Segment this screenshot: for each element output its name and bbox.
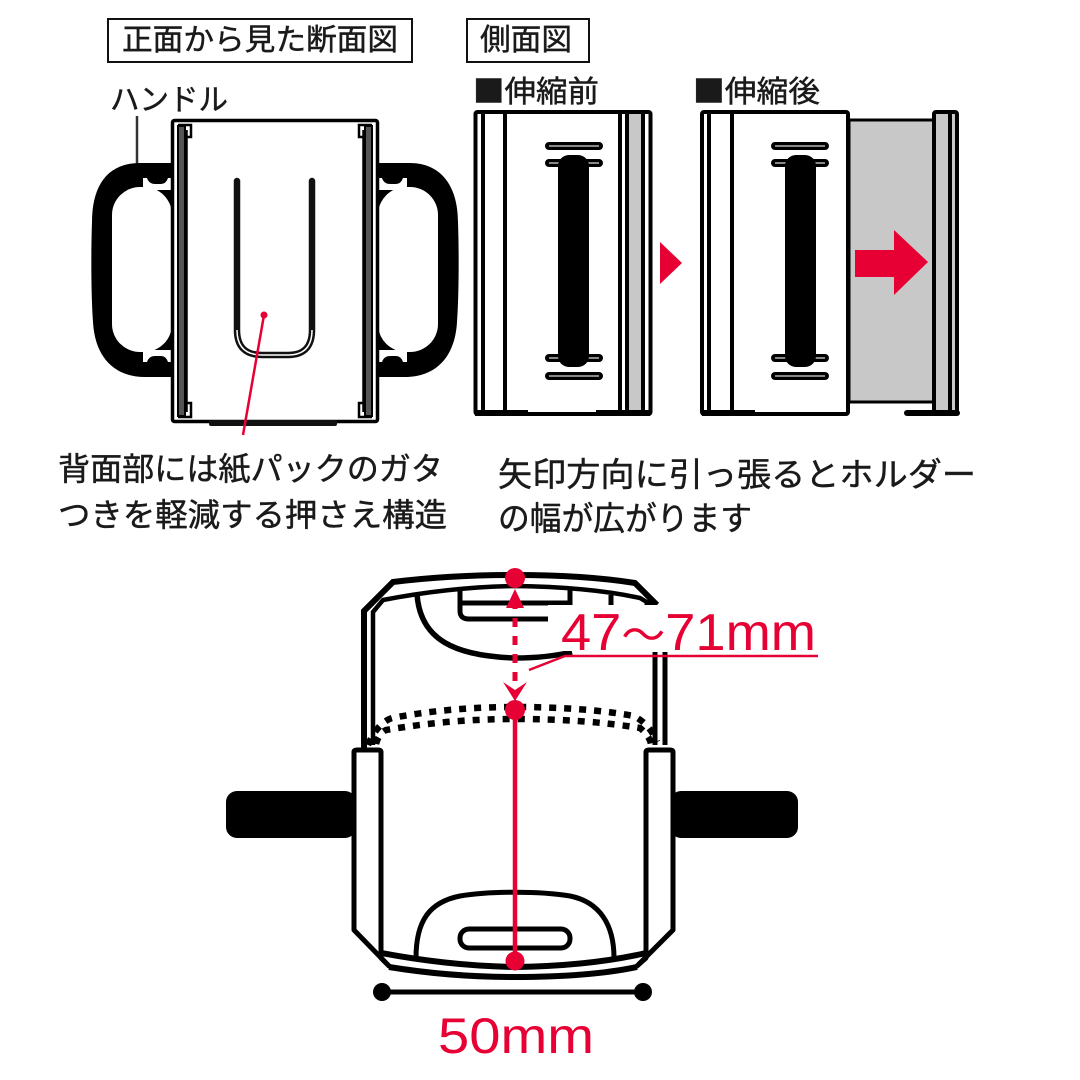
U-shaped press structure <box>237 181 312 355</box>
arrow: before to after <box>660 242 682 284</box>
dimension: height line <box>506 710 524 970</box>
holder body <box>172 120 378 422</box>
text: rear press structure note: 背面部には紙パックのガタ <box>58 451 443 487</box>
diagram: front cross-section <box>91 120 459 435</box>
red pull arrow <box>855 230 928 295</box>
dimension: 47 to 71 mm: 47〜71mm <box>561 604 816 662</box>
heading: after extension: ■伸縮後 <box>693 67 820 111</box>
right handle <box>374 163 459 377</box>
text: pull direction note: の幅が広がります <box>498 500 752 537</box>
label: handle with leader line: ハンドル <box>110 84 228 117</box>
text: pull direction note: 矢印方向に引っ張るとホルダー <box>498 456 976 493</box>
dotted original panel edge <box>368 707 657 745</box>
extended back panel <box>364 575 665 750</box>
left and right grips <box>226 791 798 838</box>
text: rear press structure note <box>58 451 447 533</box>
diagram: top view of holder <box>226 575 798 977</box>
heading: front cross-section label: 正面から見た断面図 <box>122 24 398 57</box>
heading: before extension: ■伸縮前 <box>473 67 599 111</box>
text: pull direction note <box>498 456 976 537</box>
front pocket <box>381 892 646 977</box>
side walls and front edge <box>354 750 673 966</box>
left handle <box>91 163 176 377</box>
text: rear press structure note: つきを軽減する押さえ構造 <box>58 497 447 533</box>
diagram: side view before extension <box>475 112 650 414</box>
dimension: 50 mm width: 50mm <box>438 1008 594 1064</box>
diagram: side view after extension <box>702 112 957 414</box>
red leader <box>243 312 268 435</box>
dimension: 50 mm width <box>373 983 652 1064</box>
heading: side view label: 側面図 <box>480 24 572 57</box>
label: handle with leader line <box>110 84 228 168</box>
heading: front cross-section label <box>108 19 412 62</box>
heading: side view label <box>467 19 589 62</box>
dimension: 47 to 71 mm <box>503 568 830 720</box>
